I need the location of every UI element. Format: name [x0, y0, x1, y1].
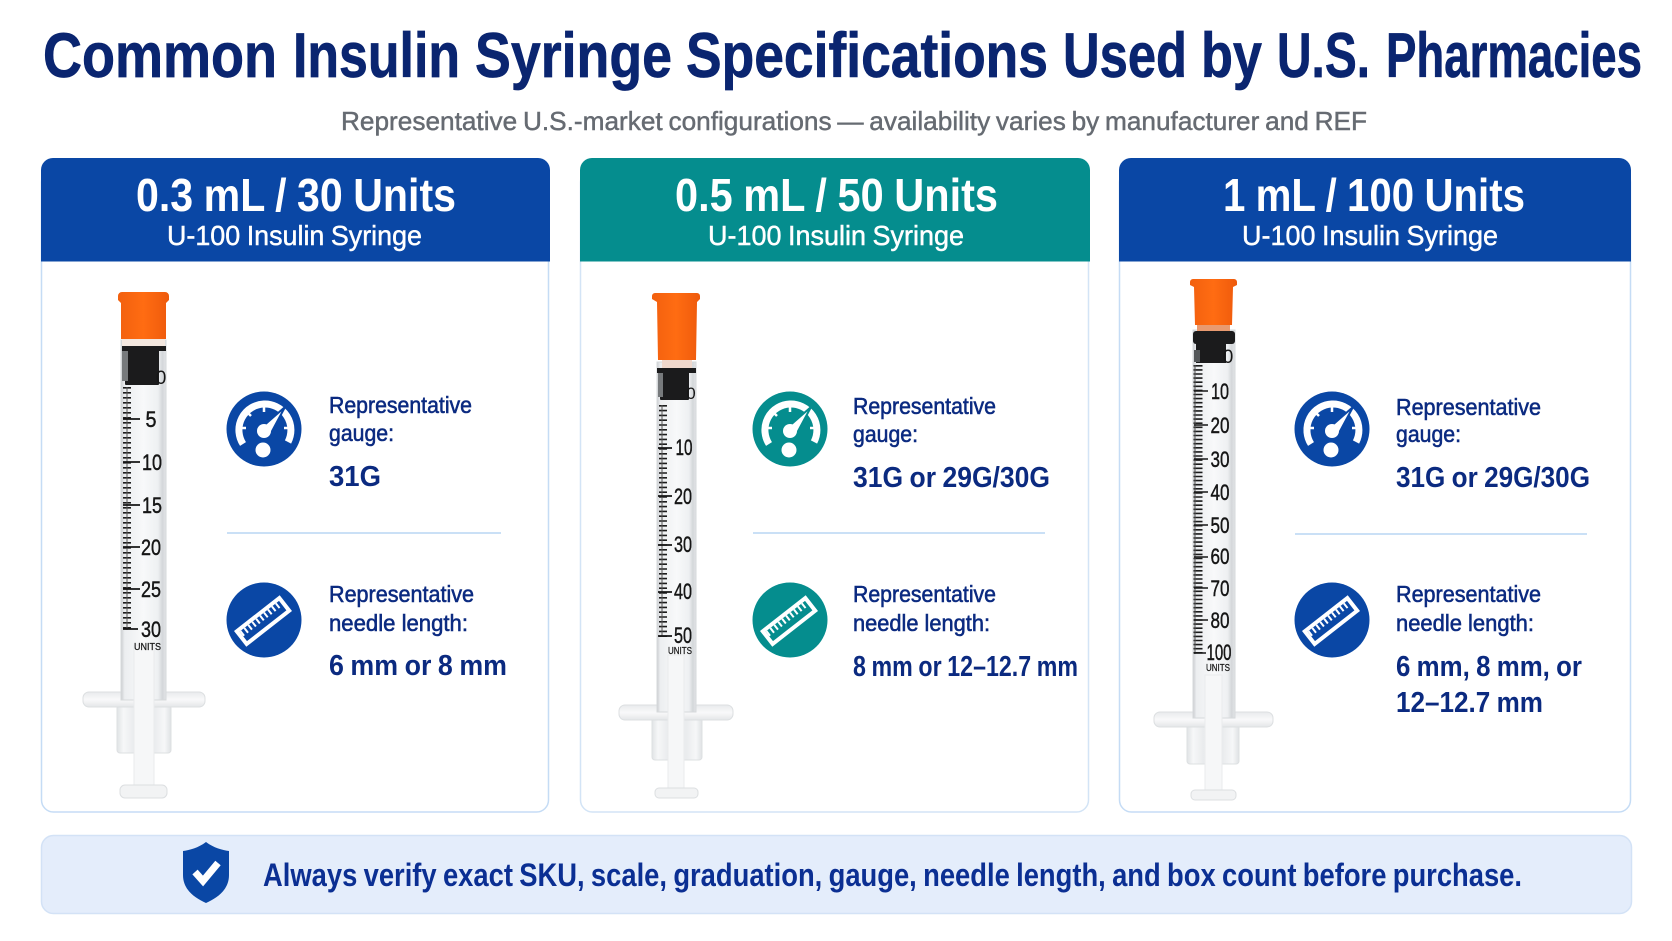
header band: U-100 Insulin Syringe [1242, 220, 1498, 251]
icon: gauge [1294, 392, 1370, 466]
syringe: 100 units: 40 [1210, 480, 1230, 505]
header band: 1 mL / 100 Units [1223, 169, 1525, 221]
syringe: 30 units [83, 292, 205, 798]
gauge label: Representative [1396, 394, 1541, 420]
header band: 0.3 mL / 30 Units [136, 169, 456, 221]
panel: 1 mL / 100 units [1119, 158, 1631, 812]
syringe: 100 units: 100 [1206, 640, 1232, 665]
syringe: 100 units: UNITS [1206, 663, 1230, 674]
needle length label: needle length: [853, 610, 990, 636]
syringe: 50 units: UNITS [668, 646, 692, 657]
title: Insulin [293, 21, 460, 91]
panel: 0.3 mL / 30 units [41, 158, 550, 812]
card body [1120, 170, 1630, 812]
syringe: 50 units: 30 [674, 532, 692, 557]
title: U.S. [1277, 21, 1370, 91]
needle length label: Representative [1396, 581, 1541, 607]
needle length value: 8 mm or 12–12.7 mm [853, 651, 1078, 683]
gauge label: gauge: [1396, 421, 1461, 447]
syringe: 30 units: 10 [142, 450, 162, 475]
title: Used [1063, 21, 1187, 91]
syringe: 100 units: 20 [1210, 413, 1230, 438]
needle length value: 6 mm or 8 mm [329, 650, 507, 682]
gauge label [1396, 394, 1541, 447]
gauge label: Representative [853, 393, 996, 419]
needle length value: 12–12.7 mm [1396, 687, 1543, 719]
syringe: 50 units: 0 [686, 384, 696, 403]
gauge label: Representative [329, 392, 472, 418]
card body [580, 170, 1088, 812]
syringe: 100 units: 50 [1210, 513, 1230, 538]
title: by [1201, 21, 1262, 91]
title: Syringe [475, 21, 672, 91]
syringe: 100 units: 0 [1223, 347, 1233, 368]
icon: gauge [752, 392, 828, 466]
syringe: 30 units: 25 [141, 577, 161, 602]
header band [580, 158, 1090, 262]
icon: ruler [752, 582, 828, 658]
syringe: 100 units: 30 [1210, 447, 1230, 472]
needle length label [329, 581, 474, 636]
needle length value: 6 mm, 8 mm, or [1396, 651, 1582, 683]
syringe: 100 units: 10 [1211, 379, 1229, 404]
syringe: 50 units: 10 [676, 435, 692, 460]
needle length value [1396, 651, 1582, 719]
panel: 0.5 mL / 50 units [580, 158, 1090, 812]
needle length label [1396, 581, 1541, 636]
gauge label [329, 392, 472, 446]
header band [1119, 158, 1631, 262]
gauge label: gauge: [329, 420, 394, 446]
syringe: 30 units: 30 [141, 617, 161, 642]
syringe: 100 units: 70 [1210, 576, 1230, 601]
syringe: 50 units: 40 [674, 579, 692, 604]
gauge value: 31G [329, 461, 381, 493]
syringe: 50 units [619, 293, 733, 798]
subtitle: Representative U.S.-market configurations — availability varies by manufacturer and REF [341, 106, 1367, 136]
syringe: 100 units: 60 [1210, 544, 1230, 569]
needle length label: Representative [853, 581, 996, 607]
needle length label: needle length: [329, 610, 468, 636]
header band: U-100 Insulin Syringe [167, 220, 422, 251]
icon: gauge [226, 392, 302, 466]
title: Common [43, 21, 277, 91]
syringe: 100 units: 80 [1210, 608, 1230, 633]
title: Specifications [686, 21, 1048, 91]
syringe: 100 units [1154, 279, 1273, 800]
syringe: 30 units: 5 [146, 407, 156, 432]
callout banner [42, 836, 1632, 914]
gauge label [853, 393, 996, 447]
header band [41, 158, 550, 262]
needle length label: needle length: [1396, 610, 1534, 636]
header band: 0.5 mL / 50 Units [675, 169, 998, 221]
card body [42, 170, 548, 812]
title [43, 21, 1642, 91]
gauge value: 31G or 29G/30G [1396, 462, 1590, 494]
syringe: 50 units: 50 [674, 623, 692, 648]
syringe: 30 units: 0 [156, 368, 166, 389]
header band: U-100 Insulin Syringe [708, 220, 964, 251]
syringe: 30 units: 15 [142, 493, 162, 518]
needle length label: Representative [329, 581, 474, 607]
syringe: 30 units: UNITS [134, 642, 161, 653]
icon: shield check [183, 842, 229, 903]
needle length label [853, 581, 996, 636]
gauge value: 31G or 29G/30G [853, 462, 1050, 494]
icon: ruler [1294, 582, 1370, 658]
syringe: 50 units: 20 [674, 484, 692, 509]
icon: ruler [226, 582, 302, 658]
syringe: 30 units: 20 [141, 535, 161, 560]
gauge label: gauge: [853, 421, 918, 447]
